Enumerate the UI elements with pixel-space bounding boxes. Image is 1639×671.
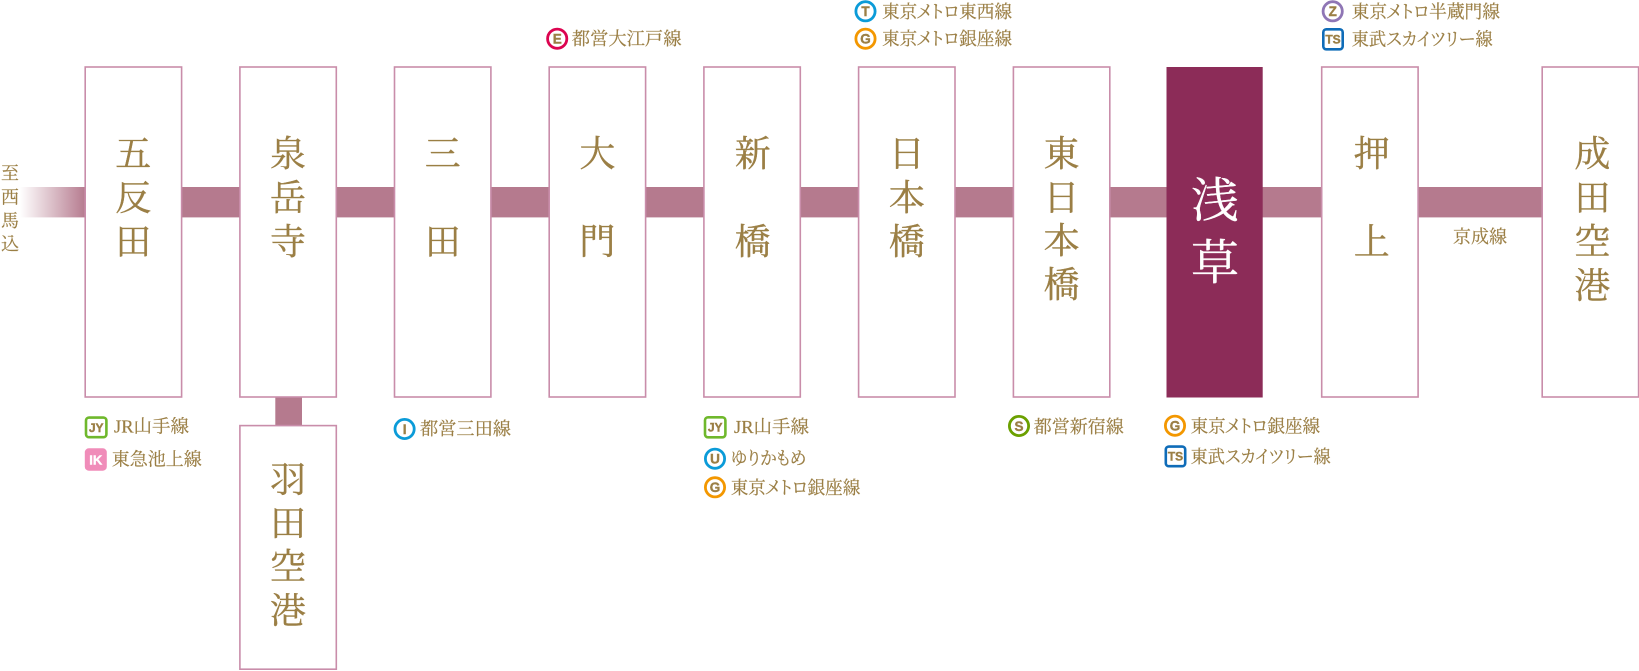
line: 都営新宿線: S (1014, 419, 1024, 434)
station: 東日本橋: 橋 (1043, 265, 1080, 305)
line: 東急池上線: IK (89, 452, 103, 467)
branch connector to Haneda (275, 396, 302, 426)
line: 東京メトロ銀座線 (新橋): 東京メトロ銀座線 (731, 478, 860, 498)
line: 東京メトロ銀座線 (浅草): 東京メトロ銀座線 (1191, 416, 1320, 436)
line: 東京メトロ銀座線 (新橋): G (710, 480, 720, 495)
station: 泉岳寺: 岳 (270, 178, 306, 218)
station: 押上: 上 (1354, 222, 1390, 262)
line: 東京メトロ半蔵門線: 東京メトロ半蔵門線 (1352, 2, 1500, 22)
station: 泉岳寺 (240, 67, 336, 397)
station: 日本橋: 橋 (889, 222, 925, 262)
station: 五反田: 田 (115, 222, 151, 262)
station: 押上: 押 (1354, 134, 1390, 174)
station: 成田空港: 港 (1574, 266, 1610, 306)
station: 東日本橋: 本 (1043, 221, 1080, 261)
line: JR山手線 (五反田) (86, 416, 189, 437)
station: 東日本橋 (1013, 67, 1110, 397)
line: 東京メトロ半蔵門線: Z (1329, 4, 1337, 19)
direction label: 至西馬込: 込 (1, 234, 19, 254)
station: 成田空港 (1542, 67, 1639, 397)
station: 羽田空港 (240, 426, 336, 669)
line: 東京メトロ銀座線 (浅草): G (1170, 418, 1180, 434)
line: 東京メトロ東西線: 東京メトロ東西線 (882, 2, 1012, 22)
station: 三田: 田 (425, 222, 461, 262)
direction label: 至西馬込: 西 (1, 188, 19, 208)
direction label: 至西馬込 (1, 164, 19, 254)
station: 成田空港: 空 (1574, 222, 1610, 262)
station: 浅草 (highlighted): 浅 (1191, 175, 1239, 228)
station: 大門 (549, 67, 646, 397)
station: 五反田: 五 (115, 134, 151, 174)
line: 東武スカイツリー線 (押上): TS (1325, 32, 1341, 46)
station: 羽田空港: 空 (270, 547, 306, 587)
line: JR山手線 (五反田): JR山手線 (114, 416, 189, 436)
line: 都営新宿線: 都営新宿線 (1034, 417, 1124, 437)
station: 日本橋: 本 (889, 178, 925, 218)
line: 都営三田線: 都営三田線 (420, 419, 511, 439)
station: 新橋: 新 (735, 134, 771, 174)
station: 新橋: 橋 (735, 222, 771, 262)
station: 東日本橋: 東 (1043, 134, 1080, 174)
line: 東京メトロ銀座線 (日本橋): G (860, 32, 871, 46)
line: 東武スカイツリー線 (浅草): 東武スカイツリー線 (1191, 447, 1331, 467)
line: 都営三田線: I (403, 422, 406, 437)
line: 東武スカイツリー線 (浅草): TS (1168, 450, 1183, 464)
station: 東日本橋: 日 (1043, 178, 1080, 218)
direction label: 至西馬込: 至 (1, 164, 19, 184)
station: 羽田空港: 羽 (270, 460, 306, 500)
station: 三田: 三 (425, 134, 461, 174)
station: 泉岳寺: 泉 (270, 134, 306, 174)
main line band (20, 187, 1544, 217)
direction label: 至西馬込: 馬 (1, 211, 19, 231)
line: 都営大江戸線: E (553, 32, 562, 46)
station: 浅草 (highlighted) (1166, 67, 1263, 398)
station: 大門: 門 (579, 222, 615, 262)
station: 成田空港: 成 (1574, 134, 1610, 174)
station: 羽田空港: 港 (270, 591, 306, 631)
line: 東武スカイツリー線 (押上): 東武スカイツリー線 (1352, 30, 1493, 50)
station: 三田 (394, 67, 491, 397)
line: JR山手線 (新橋) (705, 417, 809, 437)
line: ゆりかもめ: ゆりかもめ (731, 448, 806, 468)
line: 東急池上線 (85, 448, 202, 471)
station: 浅草 (highlighted): 草 (1191, 237, 1239, 290)
line label: 京成線: 京成線 (1453, 227, 1507, 247)
line: ゆりかもめ: U (710, 452, 720, 466)
line: JR山手線 (五反田): JY (89, 421, 104, 435)
line: JR山手線 (新橋): JR山手線 (734, 417, 809, 437)
station: 泉岳寺: 寺 (270, 222, 306, 262)
line: 東京メトロ銀座線 (日本橋): 東京メトロ銀座線 (882, 29, 1012, 49)
line: 東急池上線: 東急池上線 (112, 449, 202, 469)
station: 五反田 (85, 67, 182, 397)
station: 成田空港: 田 (1574, 178, 1610, 218)
station: 大門: 大 (579, 134, 615, 174)
station: 新橋 (704, 67, 800, 397)
station: 押上 (1322, 67, 1418, 397)
line: 東京メトロ東西線: T (861, 4, 870, 19)
station: 羽田空港: 田 (270, 504, 306, 544)
station: 日本橋: 日 (889, 134, 925, 174)
line: 都営大江戸線: 都営大江戸線 (572, 29, 682, 49)
station: 日本橋 (859, 67, 955, 397)
line: JR山手線 (新橋): JY (708, 421, 723, 435)
station: 五反田: 反 (115, 178, 151, 218)
